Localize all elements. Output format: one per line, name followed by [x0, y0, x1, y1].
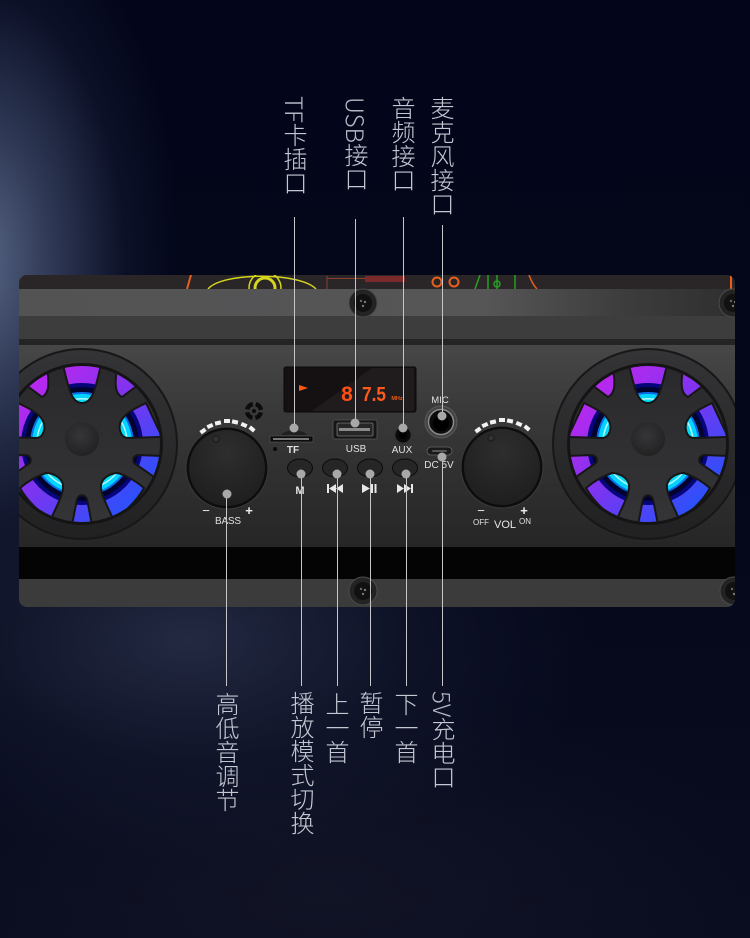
- label: previous: 上一首: [321, 692, 348, 764]
- icon: play pause: [362, 484, 376, 493]
- AUX jack: AUX: [392, 445, 413, 456]
- label: audio port: 音频接口: [387, 96, 414, 192]
- AUX jack: [392, 427, 413, 456]
- volume knob: +: [520, 503, 528, 518]
- LED display: [284, 367, 416, 412]
- volume knob: OFF: [473, 518, 489, 527]
- MIC jack: [425, 395, 457, 438]
- right speaker: [553, 349, 743, 539]
- LED display: 8: [341, 383, 353, 406]
- control buttons: [288, 459, 418, 477]
- bottom lip: [19, 579, 735, 607]
- black lower band: [19, 547, 735, 579]
- LED display: 7.5: [362, 384, 386, 406]
- upper lid bands: [19, 289, 735, 345]
- label: microphone port: 麦克风接口: [426, 96, 453, 216]
- USB port: USB: [346, 444, 367, 455]
- button label: M: M: [295, 485, 305, 497]
- label: pause: 暂停: [355, 691, 382, 739]
- screws: [349, 289, 748, 605]
- TF card slot: TF: [287, 445, 299, 456]
- DC 5V port: [424, 447, 454, 471]
- volume knob: ON: [519, 517, 531, 526]
- icon: previous: [327, 484, 343, 493]
- bass knob: −: [202, 503, 210, 518]
- USB port: [333, 420, 377, 455]
- panel: speaker control panel: [0, 272, 748, 607]
- icon: next: [397, 484, 413, 493]
- bass knob: [186, 419, 268, 527]
- label: bass and treble: 高低音调节: [211, 692, 238, 812]
- front face: [19, 345, 735, 547]
- callout lines and dots: [222, 217, 446, 686]
- bass knob: +: [245, 503, 253, 518]
- icon: microphone grille: [247, 404, 261, 418]
- volume knob: [461, 418, 543, 531]
- volume knob: VOL: [494, 519, 516, 531]
- volume knob: −: [477, 503, 485, 518]
- LED display: MHz: [391, 396, 403, 402]
- label: TF card slot: TF 卡插口: [278, 96, 313, 195]
- label: mode switch: 播放模式切换: [286, 691, 313, 835]
- label: 5V charging: 5V 充电口: [426, 691, 461, 789]
- MIC jack: MIC: [431, 395, 449, 406]
- label: next: 下一首: [390, 692, 417, 764]
- bass knob: BASS: [215, 516, 241, 527]
- left speaker: [0, 349, 177, 539]
- DC 5V port: DC 5V: [424, 460, 454, 471]
- top printed graphic strip: [19, 275, 735, 289]
- TF card slot: [270, 430, 313, 456]
- label: USB port: USB 接口: [339, 97, 374, 191]
